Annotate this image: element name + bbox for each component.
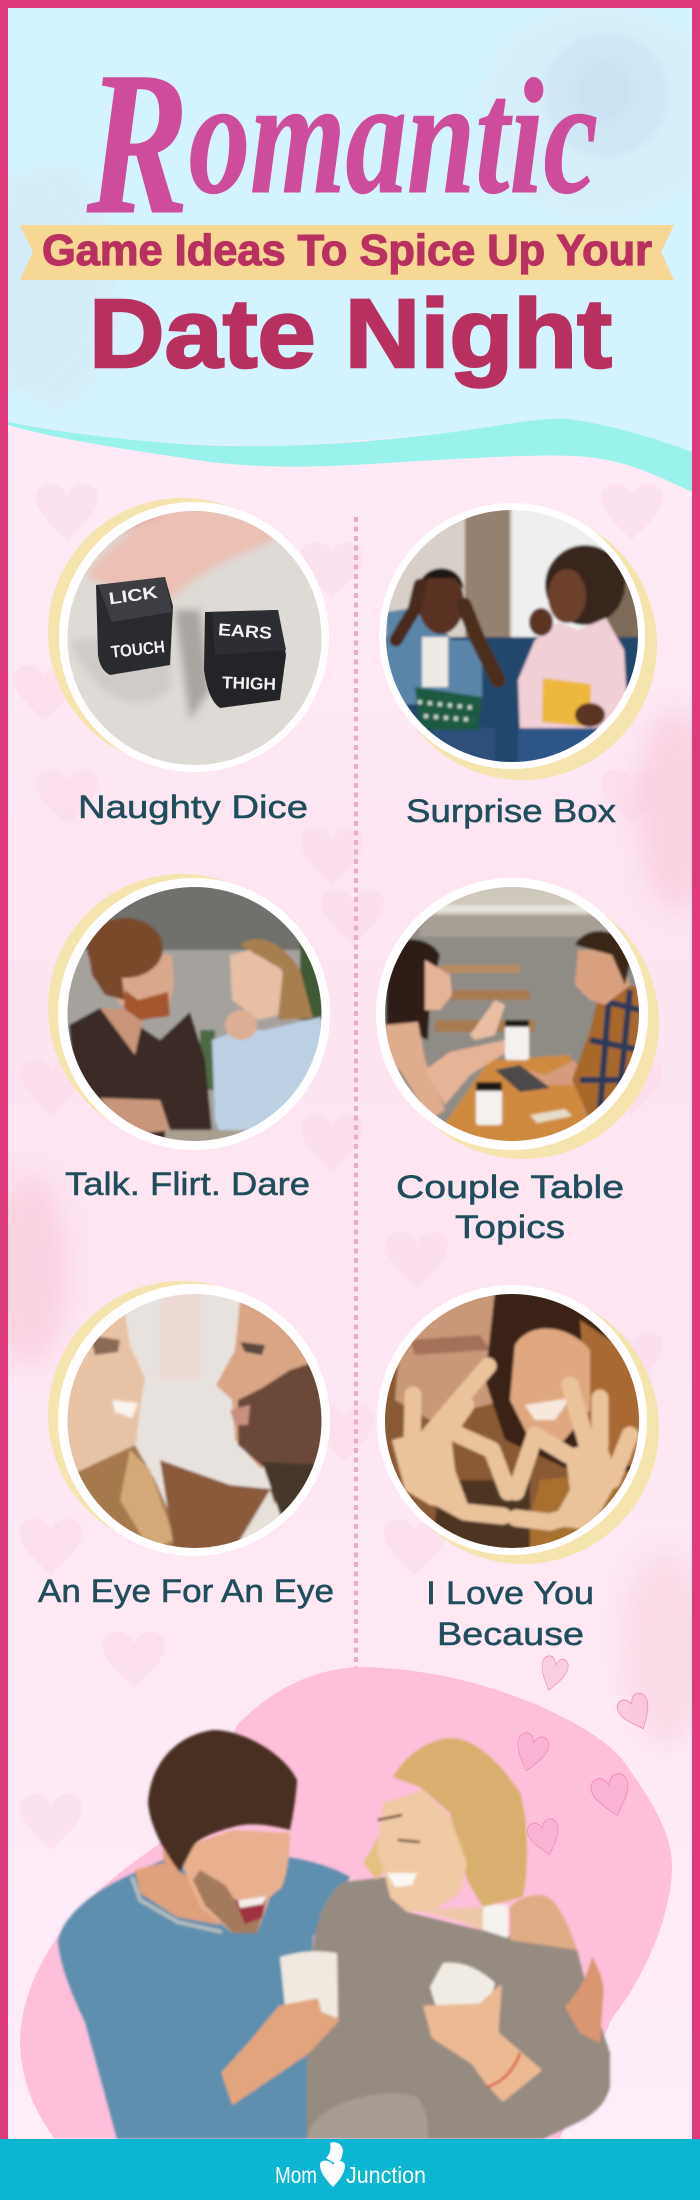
label: I Love You Because: I Love You xyxy=(426,1575,594,1611)
label: An Eye For An Eye: An Eye For An Eye xyxy=(38,1573,334,1609)
background hearts xyxy=(14,484,663,1850)
photo: laughing couple xyxy=(58,1730,610,2139)
bracelet xyxy=(487,2053,520,2087)
watercolour patches xyxy=(0,710,700,1745)
title: Romantic: R xyxy=(86,30,189,257)
woman's mug xyxy=(430,1963,495,2013)
logo: MomJunction xyxy=(275,2142,426,2188)
card: I Love You Because xyxy=(377,1285,659,1564)
palm: left xyxy=(390,1436,469,1508)
card: Talk. Flirt. Dare xyxy=(48,874,330,1150)
photo: dice: EARS xyxy=(217,620,273,643)
photo: heart hands xyxy=(385,1294,639,1548)
palm: right xyxy=(557,1445,614,1530)
photo: couple at table xyxy=(380,880,645,1150)
man's neck xyxy=(135,1863,220,1925)
label: Naughty Dice: Naughty Dice xyxy=(78,789,308,825)
title: Date Night: Date Night xyxy=(89,279,612,388)
photo: dice: LICK xyxy=(108,583,160,608)
hand: right xyxy=(516,1385,630,1522)
die 1 xyxy=(96,577,173,675)
card: Couple Table Topics xyxy=(376,878,659,1159)
logo: MomJunction: Mom xyxy=(275,2162,317,2188)
card: An Eye For An Eye xyxy=(48,1281,330,1556)
photo: eye contact xyxy=(68,1294,322,1548)
photo: dice: THIGH xyxy=(222,673,276,694)
divider xyxy=(354,517,358,1672)
label: Couple Table Topics: Couple Table xyxy=(396,1169,624,1205)
pink blob xyxy=(20,1667,672,2138)
woman's top strap xyxy=(483,1903,508,1938)
panel: header background xyxy=(8,8,692,452)
label: I Love You Because xyxy=(426,1575,594,1652)
subtitle: Game Ideas To Spice Up Your xyxy=(42,226,652,275)
ribbon banner xyxy=(20,225,674,280)
card: Surprise Box xyxy=(379,503,657,780)
man's mug xyxy=(280,1951,338,2027)
woman's chest xyxy=(417,1907,483,1930)
woman's face xyxy=(377,1790,467,1912)
label: I Love You Because: Because xyxy=(437,1616,584,1652)
label: Couple Table Topics: Topics xyxy=(455,1209,565,1245)
panel: pink background xyxy=(8,400,692,2139)
photo: dice: TOUCH xyxy=(110,637,166,662)
label: Talk. Flirt. Dare: Talk. Flirt. Dare xyxy=(65,1166,310,1202)
woman's sweater xyxy=(307,1877,610,2139)
logo: MomJunction: Junction xyxy=(346,2162,426,2188)
label: Couple Table Topics xyxy=(396,1169,624,1245)
photo: surprise box xyxy=(380,505,645,770)
die 2 xyxy=(204,610,286,708)
photo: couple talking xyxy=(68,887,322,1141)
man's beard xyxy=(193,1870,262,1933)
label: Surprise Box: Surprise Box xyxy=(406,793,616,829)
man's face xyxy=(183,1830,290,1933)
woman's hand xyxy=(425,1987,540,2100)
hand: left xyxy=(412,1366,508,1516)
card: Naughty Dice xyxy=(48,498,330,775)
man's hair xyxy=(148,1730,297,1872)
logo icon xyxy=(320,2142,345,2187)
wave xyxy=(8,419,692,492)
decorative roses in header xyxy=(545,34,667,156)
man's hand on woman's side xyxy=(565,1957,603,2043)
woman's shoulder xyxy=(510,1895,577,1950)
hand-drawn hearts xyxy=(511,1654,657,1859)
footer band xyxy=(0,2139,700,2200)
photo: dice xyxy=(68,511,322,765)
man's mouth xyxy=(235,1896,267,1924)
woman's hair xyxy=(393,1738,527,1907)
man's hand xyxy=(223,2000,338,2103)
man's sweater xyxy=(58,1857,350,2139)
